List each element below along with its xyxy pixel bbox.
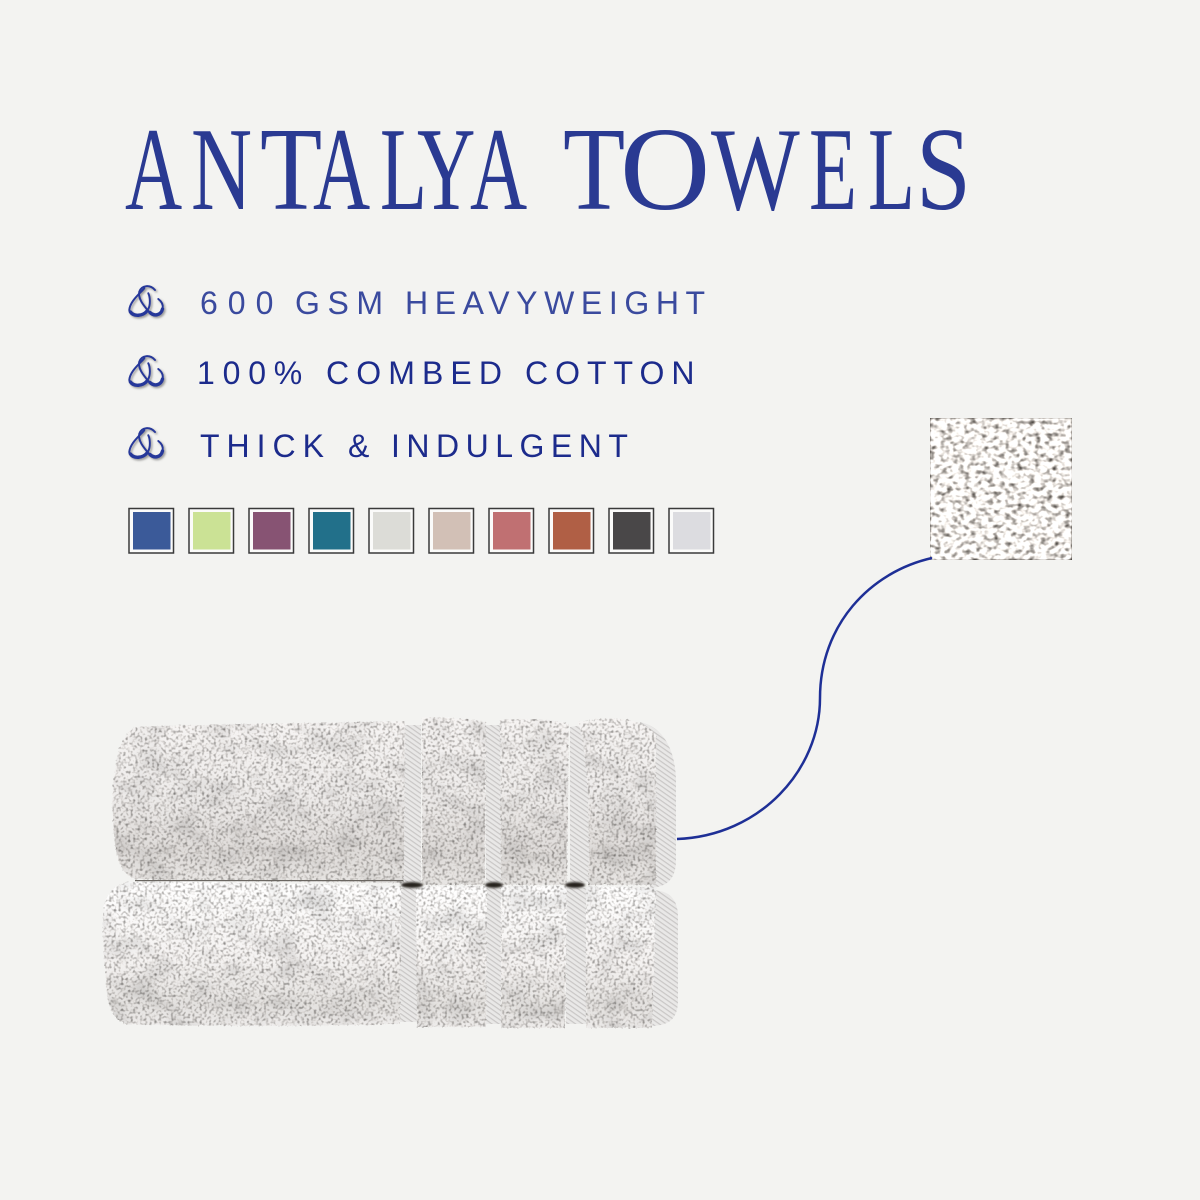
- text: thick and indulgent: &: [348, 428, 369, 464]
- icon: interlaced rings: [129, 286, 163, 315]
- feature: 600 GSM heavyweight: [129, 285, 712, 321]
- title: O: [620, 103, 710, 235]
- title: Y: [417, 103, 475, 235]
- top towel: [112, 717, 676, 888]
- shadow gaps between towels: [135, 880, 585, 888]
- folded towels: [103, 717, 678, 1028]
- title: A: [470, 103, 527, 235]
- icon: interlaced rings: [129, 356, 163, 385]
- title: [125, 103, 971, 235]
- text: 600 GSM heavyweight: HEAVYWEIGHT: [405, 285, 712, 321]
- feature list: [129, 285, 712, 464]
- colour swatches: [129, 508, 714, 553]
- text: 600 GSM heavyweight: GSM: [295, 285, 391, 321]
- title: W: [711, 103, 800, 235]
- title: S: [916, 103, 971, 235]
- connector line: [677, 558, 932, 839]
- text: combed cotton: COMBED: [326, 355, 509, 391]
- terry sections: [103, 881, 656, 1028]
- title: N: [191, 103, 252, 235]
- text: thick and indulgent: THICK: [200, 428, 331, 464]
- text: combed cotton: COTTON: [525, 355, 702, 391]
- title: T: [563, 103, 625, 235]
- title: L: [868, 103, 915, 235]
- text: 600 GSM heavyweight: 600: [200, 285, 283, 321]
- text: combed cotton: 100%: [197, 355, 310, 391]
- terry sections: [112, 717, 656, 885]
- title: A: [125, 103, 182, 235]
- title: A: [313, 103, 370, 235]
- flat hem end: [640, 722, 676, 888]
- woven stripes: [403, 724, 590, 882]
- text: thick and indulgent: INDULGENT: [391, 428, 634, 464]
- flat hem end: [650, 890, 678, 1026]
- feature: combed cotton: [129, 355, 702, 391]
- icon: interlaced rings: [129, 428, 163, 457]
- title: L: [380, 103, 427, 235]
- feature: thick and indulgent: [129, 428, 634, 464]
- fabric texture close-up: [930, 418, 1072, 560]
- title: T: [260, 103, 322, 235]
- woven stripes: [400, 888, 586, 1024]
- title: E: [809, 103, 857, 235]
- bottom towel: [103, 881, 678, 1028]
